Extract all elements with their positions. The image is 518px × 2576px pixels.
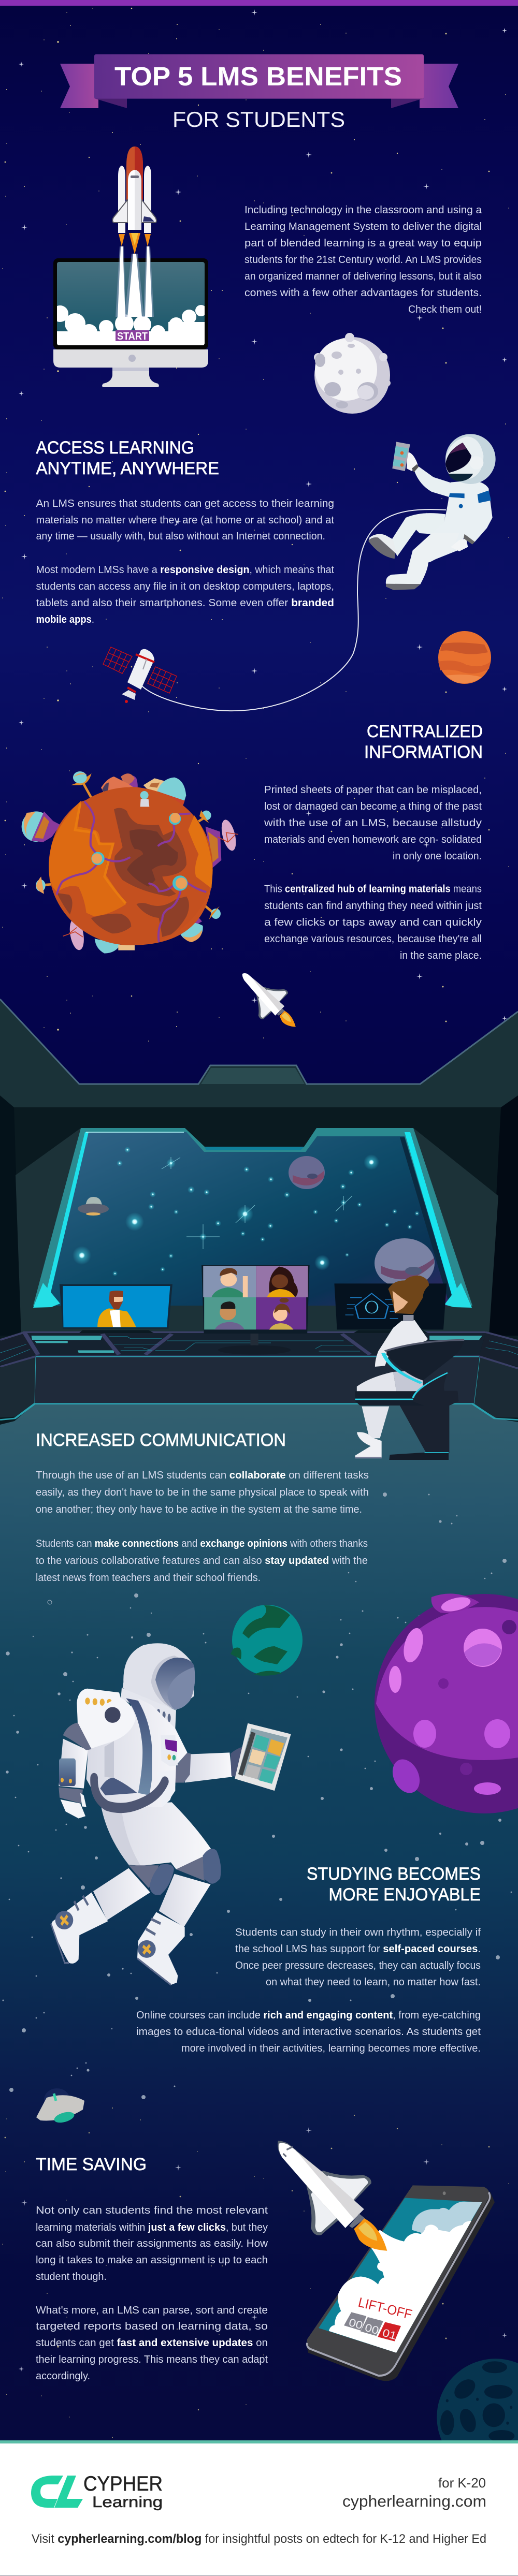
text: increased communication: Through the use of an LMS students can collaborate on different tasks [36,1470,369,1481]
text: centralized information: with the use of an LMS, because allstudy [264,817,482,829]
backpack [77,1689,121,1724]
floor star dots [2,1492,512,2099]
website block: cypherlearning.com [342,2492,486,2510]
heading: centralized information: INFORMATION [364,742,483,762]
text: centralized information: in only one location. [393,851,482,862]
illustration: colonised orange planet [22,771,239,954]
text: centralized information: Printed sheets of paper that can be misplaced, [264,784,482,796]
text: studying becomes more enjoyable [136,1927,481,2054]
text: access learning: An LMS ensures that students can get access to their learning [36,498,334,509]
text: access learning: materials no matter where they are (at home or at school) and at [36,515,334,526]
text: access learning: students can access any file in it on desktop computers, laptops, [36,581,334,592]
text: centralized information: materials and even homework are con- solidated [264,834,482,845]
text: centralized information: exchange various resources, because they're all [264,933,482,945]
text: centralized information: This centralized hub of learning materials means [264,883,482,895]
text: increased communication: one another; they only have to be active in the system at the same time. [36,1504,362,1515]
icon: monitor with START screen [52,258,208,387]
text: access learning: mobile apps. [36,614,94,625]
icon: alien saucer [36,2088,84,2125]
logo wordmark [83,2472,163,2511]
window star field [73,1147,420,1276]
text: increased communication: to the various collaborative features and can also stay updated with the [36,1555,368,1567]
heading: access learning: ACCESS LEARNING [36,438,194,458]
text: centralized information: in the same place. [400,950,482,961]
heading: centralized information: CENTRALIZED [367,722,483,741]
intro paragraph: Learning Management System to deliver the digital [244,221,482,232]
icon: moon [314,333,391,414]
text: time saving: learning materials within just a few clicks, but they [36,2222,268,2233]
text: time saving: What's more, an LMS can parse, sort and create [36,2305,268,2316]
text: studying becomes more enjoyable: Online courses can include rich and engaging content, from eye-catching [136,2010,481,2021]
logo wordmark: CYPHER [83,2472,163,2495]
text: increased communication [36,1470,369,1584]
intro paragraph: an organized manner of delivering lessons, but it also [244,271,482,282]
website block: for K-20 [438,2475,486,2491]
icon: dark cratered planet [437,2359,518,2440]
text: access learning [36,498,334,625]
text: time saving: student though. [36,2271,107,2282]
text: time saving: students can get fast and extensive updates on [36,2337,268,2349]
text: increased communication: latest news from teachers and their school friends. [36,1572,261,1584]
countdown digits: 00 [364,2322,380,2337]
monitor: video call grid [202,1265,310,1355]
subtitle: FOR STUDENTS [172,107,345,131]
icon: alien UFO in window [78,1197,109,1216]
text: studying becomes more enjoyable: images to educa-tional videos and interactive scenarios. As students get [136,2026,481,2038]
text: studying becomes more enjoyable: the school LMS has support for self-paced courses. [235,1943,481,1955]
torso [87,1699,188,1808]
background: deep space sky [0,0,518,1139]
title ribbon [60,54,458,108]
tablet [235,1723,291,1791]
intro paragraph: Including technology in the classroom and using a [244,204,482,216]
text: increased communication: Students can make connections and exchange opinions with others thanks [36,1538,368,1549]
website block [342,2475,486,2510]
monitor: single presenter [60,1284,172,1333]
spaceship interior background [0,999,518,1428]
control console desk [0,1332,518,1420]
text: time saving: accordingly. [36,2370,90,2382]
figure: seated astronaut in chair [355,1276,464,1460]
asteroids [289,1156,435,1288]
intro paragraph: Check them out! [408,304,482,315]
illustration: smartphone lift-off screen [307,2185,495,2381]
countdown digits: 01 [381,2327,398,2342]
figure: astronaut with tablet [51,1643,291,1985]
icon: mars planet [438,631,491,684]
helmet [121,1643,195,1729]
countdown digits: 00 [348,2317,364,2332]
heading: studying becomes more enjoyable: MORE ENJOYABLE [328,1885,481,1905]
intro paragraph: students for the 21st Century world. An LMS provides [244,254,482,266]
heading: access learning: ANYTIME, ANYWHERE [36,459,219,478]
text: time saving: targeted reports based on learning data, so [36,2321,268,2332]
text: access learning: tablets and also their smartphones. Some even offer branded [36,597,334,609]
text: studying becomes more enjoyable: on what they need to learn, no matter how fast. [266,1977,481,1988]
text: time saving: Not only can students find the most relevant [36,2205,268,2216]
footer [0,2440,518,2576]
icon: launching rocket [112,147,156,317]
blog call to action: Visit cypherlearning.com/blog for insightful posts on edtech for K-12 and Higher Ed [32,2532,486,2546]
text: increased communication: easily, as they don't have to be in the same physical place to speak with [36,1487,369,1498]
text: centralized information: a few clicks or taps away and can quickly [264,917,482,928]
text: studying becomes more enjoyable: Students can study in their own rhythm, especially if [235,1927,481,1938]
countdown digits [348,2317,398,2342]
heading: access learning [36,438,219,478]
icon: satellite [103,647,177,703]
logo wordmark: Learning [92,2494,163,2511]
floor gradient background [0,1404,518,2441]
text: centralized information: students can find anything they need within just [264,900,482,912]
text: access learning: Most modern LMSs have a responsive design, which means that [36,564,334,576]
logo: Cypher Learning mark [31,2476,83,2508]
shoulder pack and left arm [59,1697,136,1819]
heading: increased communication: INCREASED COMMUNICATION [36,1430,286,1450]
text: time saving: can also submit their assignments as easily. How [36,2238,268,2249]
text: centralized information: lost or damaged can become a thing of the past [264,801,482,812]
icon: green planet [231,1605,303,1676]
heading: studying becomes more enjoyable: STUDYING BECOMES [307,1864,481,1884]
text: time saving: long it takes to make an assignment is up to each [36,2255,268,2266]
icon: floating astronaut with phone [368,434,496,590]
text: centralized information [264,784,482,961]
text: access learning: any time — usually with, but also without an Internet connection. [36,531,325,542]
ship window with view of space [33,1128,472,1308]
monitor: hexagon interface [334,1283,447,1333]
intro paragraph: part of blended learning is a great way to equip [244,238,482,249]
icon: purple planet [375,1593,518,1813]
heading: time saving: TIME SAVING [36,2155,147,2174]
text: studying becomes more enjoyable: more involved in their activities, learning becomes more effective. [181,2043,481,2054]
arm holding tablet [175,1746,247,1782]
intro paragraph: comes with a few other advantages for students. [244,287,482,299]
tether line [142,509,446,711]
legs [51,1802,221,1985]
illustration: smartphone lift-off screen: LIFT-OFF [357,2294,414,2322]
heading: centralized information [364,722,483,762]
title ribbon: TOP 5 LMS BENEFITS [114,62,402,91]
text: time saving [36,2205,268,2382]
icon: monitor with START screen: START [117,331,148,342]
icon: small shuttle [242,973,296,1027]
text: studying becomes more enjoyable: Once peer pressure decreases, they can actually focus [235,1960,481,1971]
heading: studying becomes more enjoyable [307,1864,481,1905]
intro paragraph [244,204,482,315]
icon: large shuttle [278,2141,387,2251]
text: time saving: their learning progress. This means they can adapt [36,2354,268,2365]
